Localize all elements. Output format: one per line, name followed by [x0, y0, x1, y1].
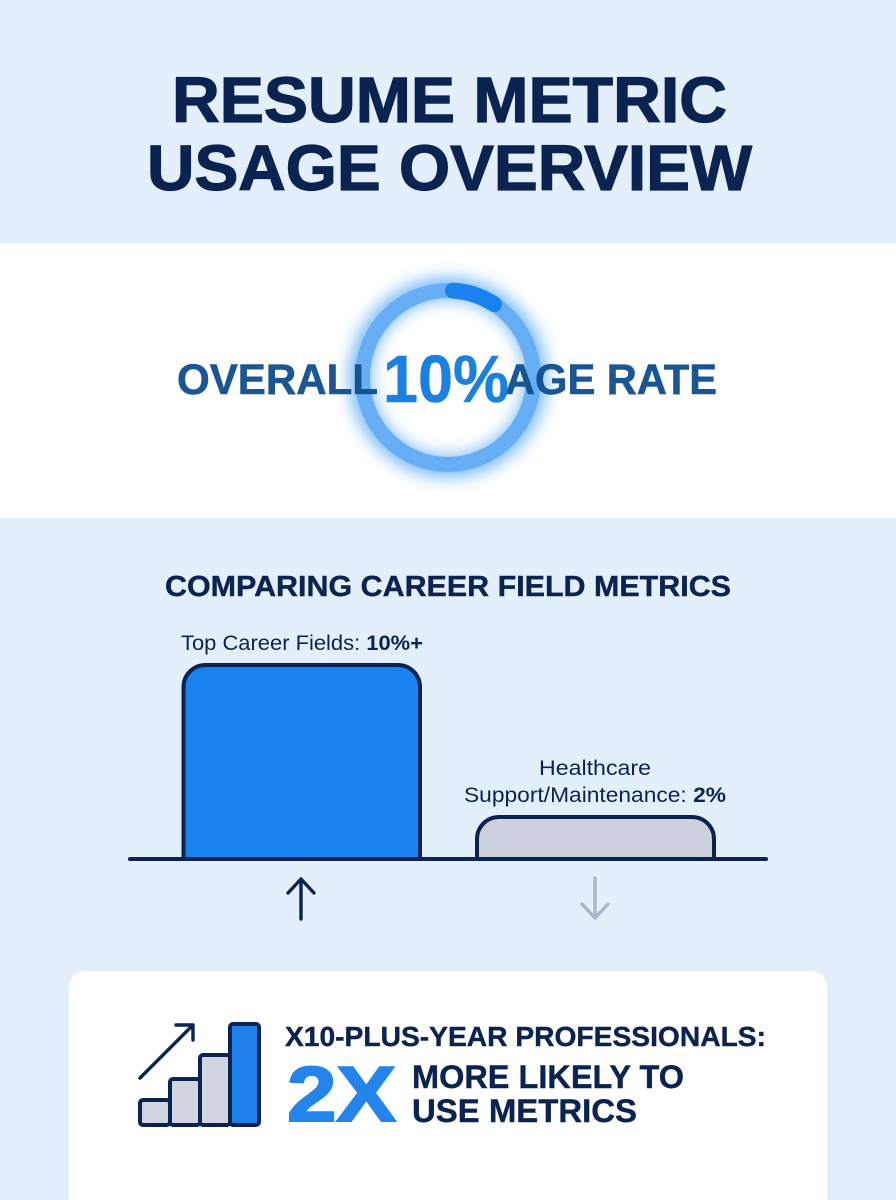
stat: 10%: 10%: [383, 342, 509, 417]
baseline: [130, 857, 766, 861]
label: healthcare support/maintenance: Healthcare: [539, 757, 651, 780]
bar: healthcare support/maintenance: [477, 817, 714, 859]
label: overall usage rate: [177, 356, 717, 404]
arrow: down: [582, 878, 608, 918]
title: RESUME METRIC: [172, 64, 727, 136]
arrow: up: [288, 879, 314, 919]
panel: overall usage rate: [0, 243, 896, 518]
icon: rising bars with arrow: [140, 1024, 259, 1125]
text: x10-plus-year professionals: X10-PLUS-YEAR PROFESSIONALS:: [285, 1021, 766, 1052]
ring gauge: [360, 288, 536, 466]
panel: title band: [0, 0, 896, 243]
text: more likely to use metrics: USE METRICS: [412, 1093, 637, 1129]
label: healthcare support/maintenance: Support/Maintenance: 2%: [464, 784, 726, 807]
heading: comparing career field metrics: COMPARING CAREER FIELD METRICS: [165, 571, 731, 603]
bar: top career fields: [184, 665, 420, 859]
panel: career field comparison: [0, 518, 896, 1200]
text: more likely to use metrics: [412, 1059, 684, 1129]
stat: 2x: 2X: [287, 1050, 396, 1138]
label: healthcare support/maintenance: [464, 757, 726, 807]
text: more likely to use metrics: MORE LIKELY TO: [412, 1059, 684, 1095]
label: top career fields: Top Career Fields: 10%+: [181, 632, 423, 655]
label: overall usage rate: OVERALL: [177, 356, 378, 404]
label: overall usage rate: AGE RATE: [505, 356, 717, 404]
title: USAGE OVERVIEW: [147, 132, 753, 204]
bar chart: [130, 632, 766, 919]
card: professionals callout: [69, 971, 827, 1200]
title: [147, 64, 753, 204]
